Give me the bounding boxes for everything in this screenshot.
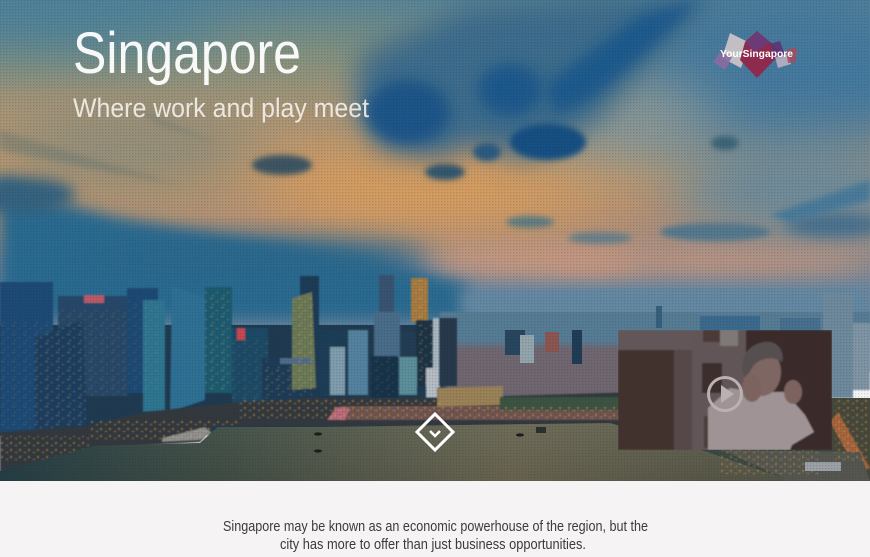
intro paragraph: Singapore may be known as an economic powerhouse of the region, but the	[223, 519, 648, 535]
man: hands	[742, 380, 760, 402]
logo: YourSingapore	[713, 31, 797, 78]
skyscrapers	[0, 275, 870, 437]
river water	[0, 423, 790, 481]
intro paragraph	[223, 519, 648, 553]
scroll-down diamond button	[417, 414, 453, 450]
play icon	[708, 378, 742, 410]
waterfront land and shore lights	[0, 386, 640, 472]
room wall cabinets	[692, 330, 746, 450]
man: head	[744, 358, 782, 396]
window lights	[0, 280, 434, 430]
subtitle: Where work and play meet	[73, 93, 369, 123]
intro paragraph: city has more to offer than just business opportunities.	[280, 537, 586, 553]
curtain panel	[618, 350, 674, 450]
sky	[0, 0, 870, 340]
boats	[314, 427, 546, 453]
logo: YourSingapore: YourSingapore	[720, 48, 793, 60]
man: shirt	[708, 388, 814, 450]
video thumbnail with play button	[618, 330, 832, 450]
title: Singapore	[73, 21, 301, 86]
distant city haze	[440, 306, 870, 400]
right bank land	[698, 398, 870, 481]
city base	[0, 325, 640, 435]
clouds	[0, 0, 870, 320]
